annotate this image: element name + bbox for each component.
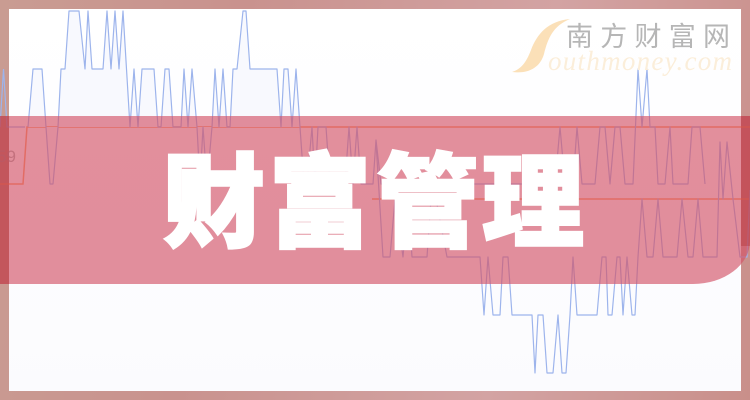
upper price line [28, 11, 300, 184]
title: 理 [482, 122, 584, 269]
title: 富 [269, 122, 371, 269]
left frame shade [0, 116, 9, 284]
pink title band [0, 116, 750, 284]
orange reference lines [0, 127, 750, 199]
title: 财 [163, 122, 265, 269]
left edge spike [0, 69, 25, 127]
logo swoosh S [512, 19, 570, 72]
right frame shade [741, 116, 750, 246]
logo: southmoney watermark [512, 19, 732, 76]
lower price line [376, 142, 750, 373]
logo wordmark Latin: outhmoney.com [548, 46, 732, 76]
title: 管 [377, 122, 479, 269]
logo wordmark Chinese: 南方财富网 [566, 22, 730, 52]
upper price line continuation [300, 69, 705, 184]
